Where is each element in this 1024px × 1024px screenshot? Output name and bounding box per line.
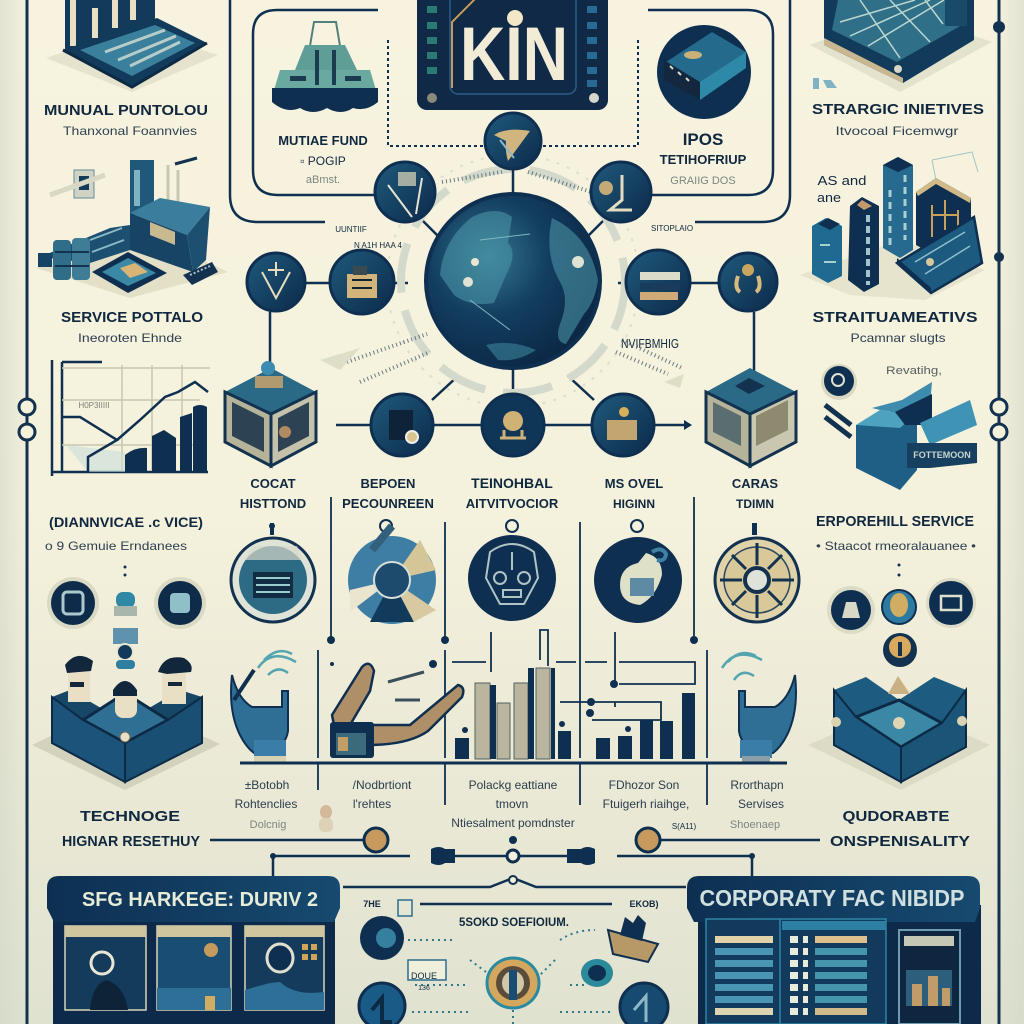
label: M&A: ane [817,190,841,205]
label: M&A [817,173,866,205]
label: enterprise service [816,513,976,553]
label: mutual portfolio: Thanxonal Foannvies [63,124,197,138]
label: strategic metrics: STRAITUAMEATIVS [812,309,978,326]
baseline [240,762,787,764]
captions under the columns: tmovn [496,797,528,811]
captions under the columns: Ntiesalment pomdnster [451,816,575,830]
side phone [899,930,960,1024]
label: M&A: AS and [818,173,866,188]
column headings: HIGINN [613,497,655,511]
icons: governance circles [47,566,206,669]
logo panel [417,0,608,110]
label: service portfolio [61,309,203,345]
tablet [92,252,167,293]
gear icon [360,916,404,960]
captions under the columns: Rrorthapn [730,778,784,792]
label: technology: TECHNOGE [80,808,180,825]
tower tall [883,157,913,258]
header text: SFG HARKEGE: DURIV 2 [82,889,318,911]
node: bottom left [371,394,433,456]
node: top [485,113,541,169]
bar chart: navy [560,632,695,759]
label: IPOs: IPOS [683,130,723,149]
iso box: revatihg [821,364,977,490]
medallion: map [594,537,682,623]
callouts around the globe: SITOPLAIO [651,224,693,233]
panel: corporate table [687,876,981,1024]
document icon: 136 [418,985,430,992]
centre top bar: 7HE [363,899,381,909]
label: service portfolio: Ineoroten Ehnde [78,331,182,345]
label: corporate responsibility: ONSPENISALITY [830,833,970,850]
label: strategic initiatives: STRARGIC INIETIVES [812,101,984,118]
label: strategic metrics: Pcamnar slugts [850,331,946,345]
panel: centre bottom network [359,899,668,1024]
iso panel: top left [46,0,218,92]
small figure icon [319,805,333,832]
iso panel: top right [810,0,992,92]
captions under the columns: ±Botobh [245,778,289,792]
connector row with coins and plugs [210,828,820,887]
round icon bottom right [620,983,668,1024]
label: governance [45,514,203,553]
table [706,919,886,1024]
keyboard [183,262,218,285]
panel: mutual fund: ▫ POGIP [300,154,346,168]
ship icon [608,915,658,962]
node: mid left inner [330,250,394,314]
callouts around the globe: UUNTIIF [335,225,367,234]
captions under the columns: FDhozor Son [609,778,679,792]
pendants above medallions [269,520,757,535]
iso building: left [225,361,316,466]
card [50,170,105,198]
captions under the columns: Polackg eattiane [469,778,558,792]
label: strategic initiatives [812,101,984,138]
tower short [812,218,842,283]
column headings: PECOUNREEN [342,496,434,511]
centre title: 5SOKD SOEFIOIUM. [459,915,569,929]
label: service portfolio: SERVICE POTTALO [61,309,203,326]
column headings: HISTTOND [240,496,306,511]
label: technology [62,808,200,850]
icon: IPO device [657,25,751,119]
node: mid left outer [247,253,305,311]
node: upper left [375,162,435,222]
platform [897,217,982,293]
figure right [158,657,192,704]
panel: IPOs: GRAIIG DOS [670,175,736,187]
label: strategic initiatives: Itvocoal Ficemwgr [836,124,958,138]
label: corporate responsibility [830,808,970,850]
callouts around the globe: NVIFBMHIG [621,336,679,351]
small glyphs [813,78,837,89]
iso building: right [706,368,796,466]
panel: mutual fund [272,22,378,186]
captions under the columns: /Nodbrtiont [353,778,412,792]
column headings: COCAT [250,476,296,491]
captions under the columns [235,778,784,831]
target emblem [487,958,539,1008]
label: mutual fund: MUTIAE FUND [278,133,368,148]
screen 1 [65,926,146,1010]
icon: right robotic hand [722,653,796,762]
towers [130,158,197,215]
label: mutual portfolio: MUNUAL PUNTOLOU [44,102,208,119]
captions under the columns: Ftuigerh riaihge, [603,797,689,811]
iso buildings: strategic [800,152,985,300]
iso box: revatihg: FOTTEMOON [913,450,971,460]
centre top bar [363,899,659,916]
chart: line and bars: H0P3IIIII [78,401,110,410]
barrels [38,238,90,280]
column headings: BEPOEN [361,476,415,491]
bar chart: tan and navy [452,630,576,759]
connector lines of the central hub [230,0,790,430]
figure left [65,656,93,702]
label: enterprise service: ERPOREHILL SERVICE [816,513,974,530]
callouts around the globe [320,172,693,388]
logo wordmark: KIN [460,12,568,97]
iso box: enterprise [808,676,990,790]
label: governance: (DIANNVICAE .c VICE) [49,514,203,530]
node: mid right outer [719,253,777,311]
screen 3 [245,926,324,1010]
iso panel: service portfolio [36,158,228,298]
column headings: CARAS [732,476,778,491]
back building [916,178,971,250]
captions under the columns: Dolcnig [250,819,286,831]
chart: line and bars [52,360,210,476]
label: governance: o 9 Gemuie Erndanees [45,539,187,553]
document icon: DOUE [411,971,437,981]
building stripes [65,0,155,50]
medallion: hologram [231,538,315,622]
round icon bottom left [359,983,405,1024]
label: technology: HIGNAR RESETHUY [62,833,200,850]
wireframe [932,152,978,180]
column headings: TEINOHBAL [471,475,553,491]
iso box: figures [32,656,220,790]
tower navy [848,197,879,292]
column headings: MS OVEL [605,476,663,491]
medallion: compass [715,538,799,622]
dotted links [408,930,610,1024]
column headings [240,475,778,511]
globe [387,155,639,407]
medallion: pie [348,526,436,624]
node: upper right [591,162,651,222]
node: bottom right [592,394,654,456]
captions under the columns: Shoenaep [730,819,780,831]
icon: mechanical hand with wallet [330,660,463,758]
column dividers [318,497,707,805]
column headings: TDIMN [736,497,774,511]
document icon [408,960,446,992]
iso box: revatihg: Revatihg, [886,365,942,377]
captions under the columns: Servises [738,797,784,811]
panel: mutual fund: aBmst. [306,174,340,186]
icon: mutual fund stack [272,22,378,112]
label: corporate responsibility: QUDORABTE [842,808,950,825]
label: strategic metrics [812,309,978,345]
node: bottom centre [482,394,544,456]
panel: IPOs: TETIHOFRIUP [660,152,747,167]
header text: CORPORATY FAC NIBIDP [700,885,964,911]
globe continents [440,211,513,304]
figure centre [113,681,137,718]
panel: left bottom screens [47,876,340,1024]
column headings: AITVITVOCIOR [466,496,559,511]
screen 2 [157,926,231,1010]
icon: left robotic hand [231,651,296,762]
icons: enterprise circles [827,564,976,667]
centre top bar: EKOB) [630,899,659,909]
label: mutual portfolio [44,102,208,138]
captions under the columns: S(A11) [672,822,696,831]
captions under the columns: l'rehtes [353,797,391,811]
medallion: robot mask [468,535,556,621]
node: mid right inner [626,250,690,314]
callouts around the globe: N A1H HAA 4 [354,241,403,250]
eye icon [581,959,613,987]
logo side indicators [427,6,597,87]
captions under the columns: Rohtenclies [235,797,297,811]
label: enterprise service: • Staacot rmeoralauanee • [816,539,976,553]
panel: IPOs [657,25,751,187]
